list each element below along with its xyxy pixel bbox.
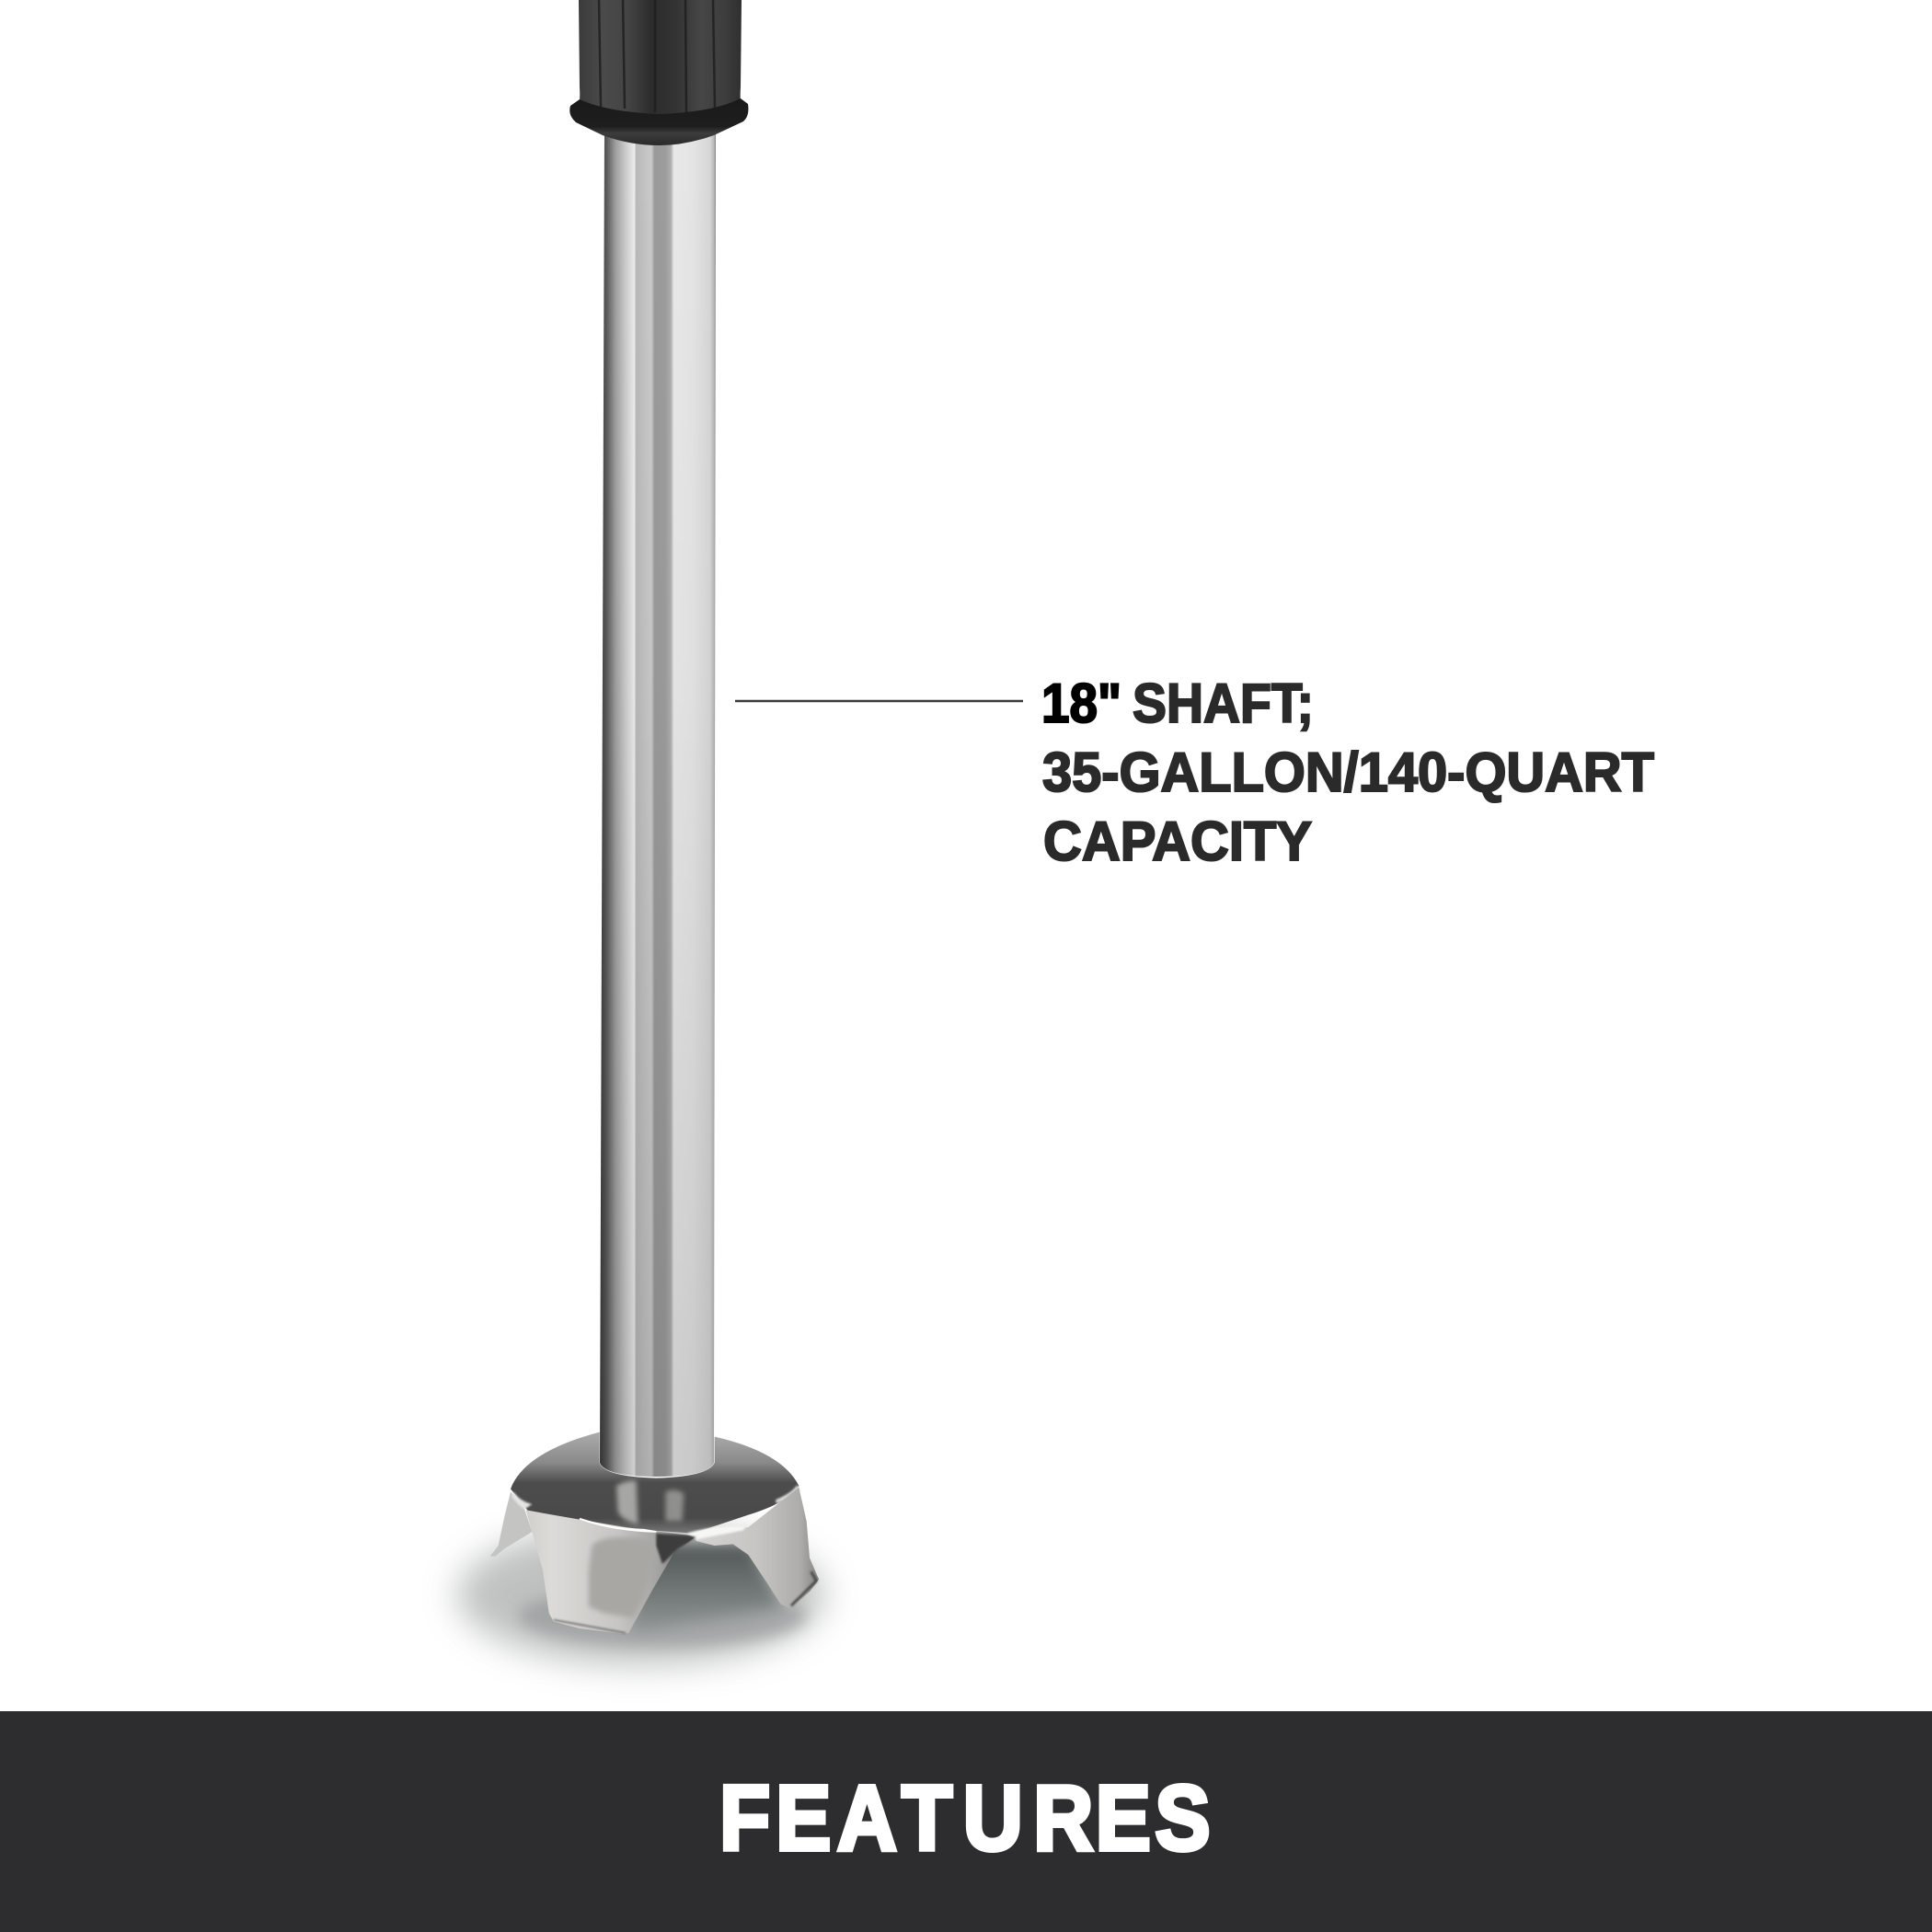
rubber collar xyxy=(569,98,748,145)
callout line 2: 35-GALLON/140-QUART xyxy=(1042,742,1654,803)
footer band xyxy=(0,1711,1932,1932)
product: immersion blender shaft xyxy=(457,0,825,1665)
right foot xyxy=(696,1488,819,1608)
foot inner reflection xyxy=(589,1537,658,1617)
callout line 3: CAPACITY xyxy=(1043,811,1312,872)
callout line 1: SHAFT; xyxy=(1133,673,1314,734)
footer heading: FEATURES xyxy=(719,1767,1211,1870)
soft floor shadow xyxy=(457,1524,825,1665)
steel shaft xyxy=(600,133,716,1477)
blade guard xyxy=(457,1432,825,1665)
rim highlights xyxy=(554,1519,816,1633)
handle grip xyxy=(578,0,742,120)
guard dome xyxy=(511,1432,799,1534)
callout: shaft size and capacity xyxy=(1041,673,1654,872)
front left foot xyxy=(526,1511,696,1634)
callout leader line xyxy=(735,700,1023,702)
dome reflections xyxy=(512,1480,799,1524)
rear left foot xyxy=(490,1492,532,1557)
callout number: 18" xyxy=(1041,673,1121,734)
